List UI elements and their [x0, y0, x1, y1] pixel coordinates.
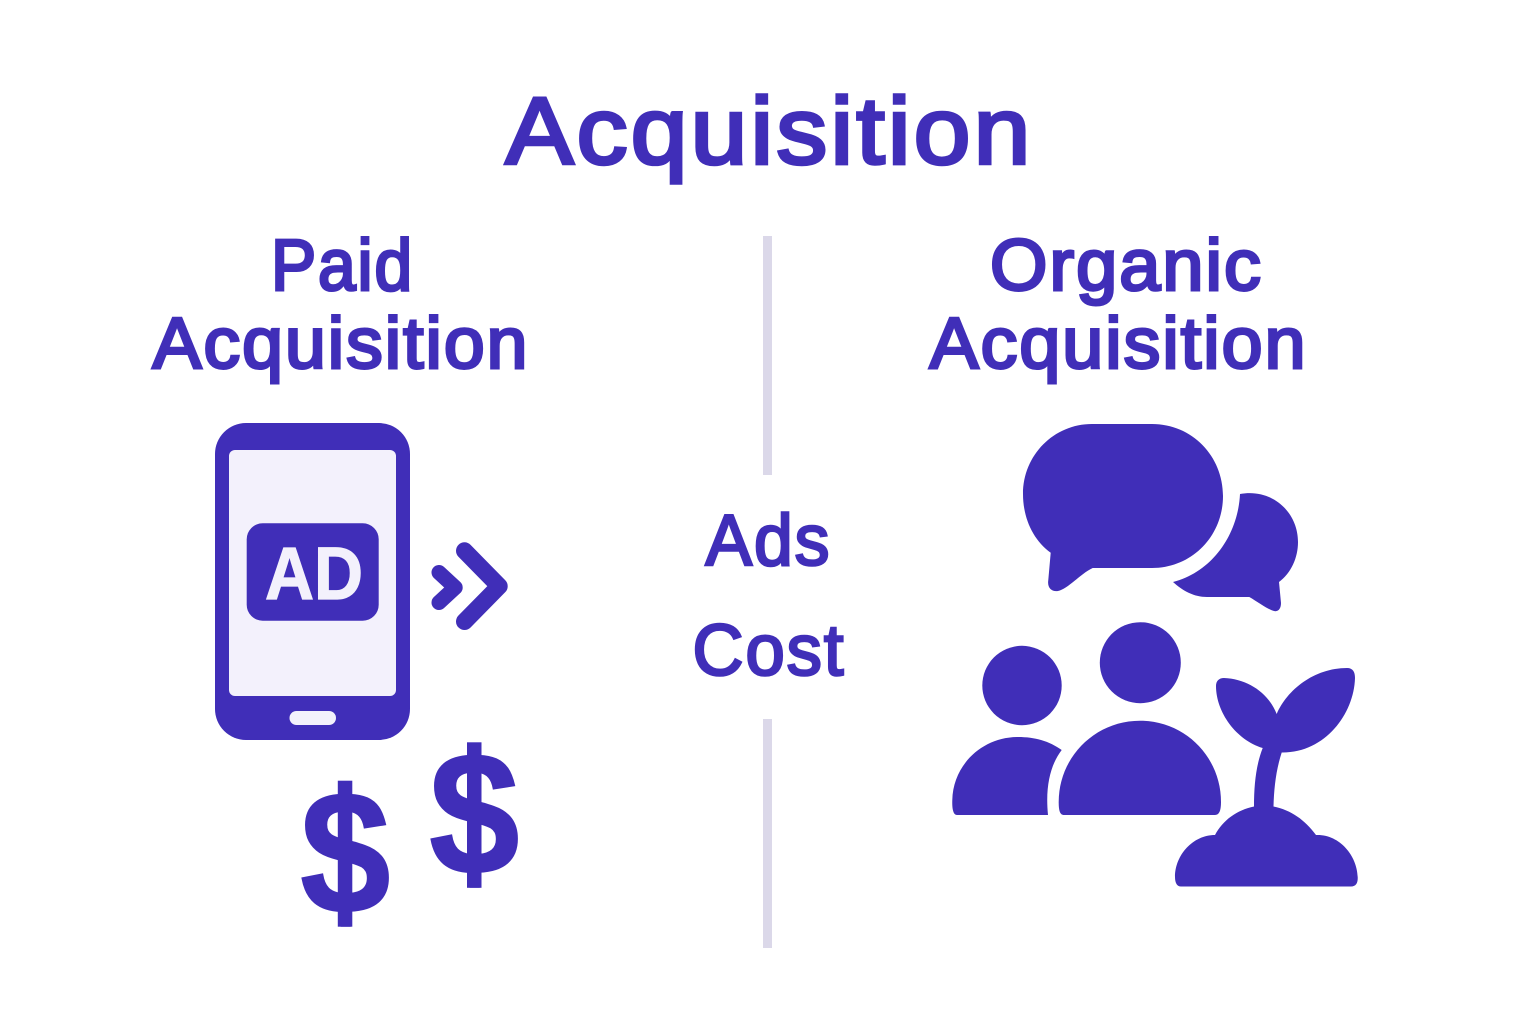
icon: dollar signs: [300, 716, 520, 950]
heading: organic acquisition: Acquisition: [930, 304, 1308, 384]
title: Acquisition: [506, 78, 1034, 184]
heading: organic acquisition: Organic: [990, 226, 1263, 306]
arrow: double chevron: [439, 551, 499, 622]
icon: sprout: [1175, 668, 1358, 886]
icon: speech bubbles: [1023, 424, 1298, 611]
center label: ads cost: Cost: [692, 611, 846, 691]
heading: organic acquisition: [930, 226, 1308, 384]
ad badge: AD: [265, 532, 363, 615]
icon: dollar signs: $: [429, 716, 520, 911]
icon: dollar signs: $: [300, 755, 391, 950]
center label: ads cost: [692, 501, 846, 691]
icon: people: [952, 622, 1221, 815]
center label: ads cost: Ads: [706, 501, 832, 581]
ad badge: [247, 523, 379, 621]
heading: paid acquisition: [152, 226, 530, 384]
heading: paid acquisition: Paid: [271, 226, 414, 306]
heading: paid acquisition: Acquisition: [152, 304, 530, 384]
icon: phone with ad: [215, 423, 410, 740]
